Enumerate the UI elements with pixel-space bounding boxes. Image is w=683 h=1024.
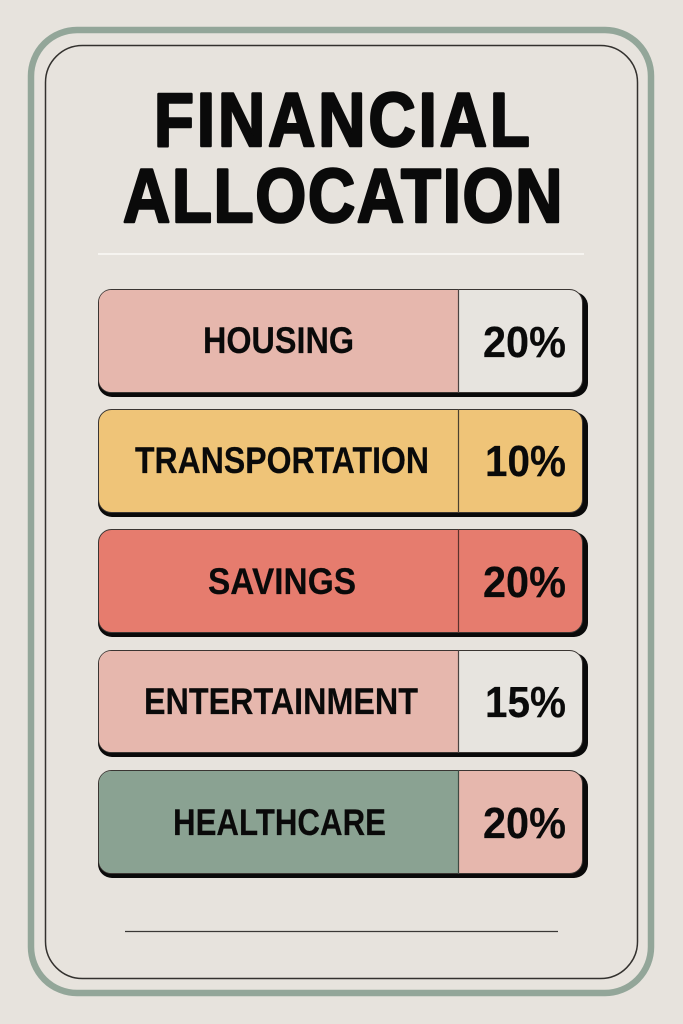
row: savings — [98, 529, 588, 637]
title: ALLOCATION — [123, 154, 562, 239]
row: healthcare: 20% — [483, 799, 566, 848]
row: savings: 20% — [483, 558, 566, 607]
inner frame — [46, 46, 638, 978]
row: housing: 20% — [483, 318, 566, 367]
row: entertainment: 15% — [485, 678, 566, 727]
title — [123, 78, 562, 239]
row: transportation: 10% — [485, 437, 566, 486]
row: savings: SAVINGS — [208, 561, 356, 602]
row: transportation: TRANSPORTATION — [135, 440, 429, 481]
row: housing: HOUSING — [203, 320, 354, 361]
title: FINANCIAL — [154, 78, 530, 163]
row: housing — [98, 289, 588, 397]
row: healthcare — [98, 770, 588, 878]
row: transportation — [98, 409, 588, 517]
row: entertainment — [98, 650, 588, 757]
row: entertainment: ENTERTAINMENT — [144, 681, 418, 722]
row: healthcare: HEALTHCARE — [173, 802, 386, 843]
